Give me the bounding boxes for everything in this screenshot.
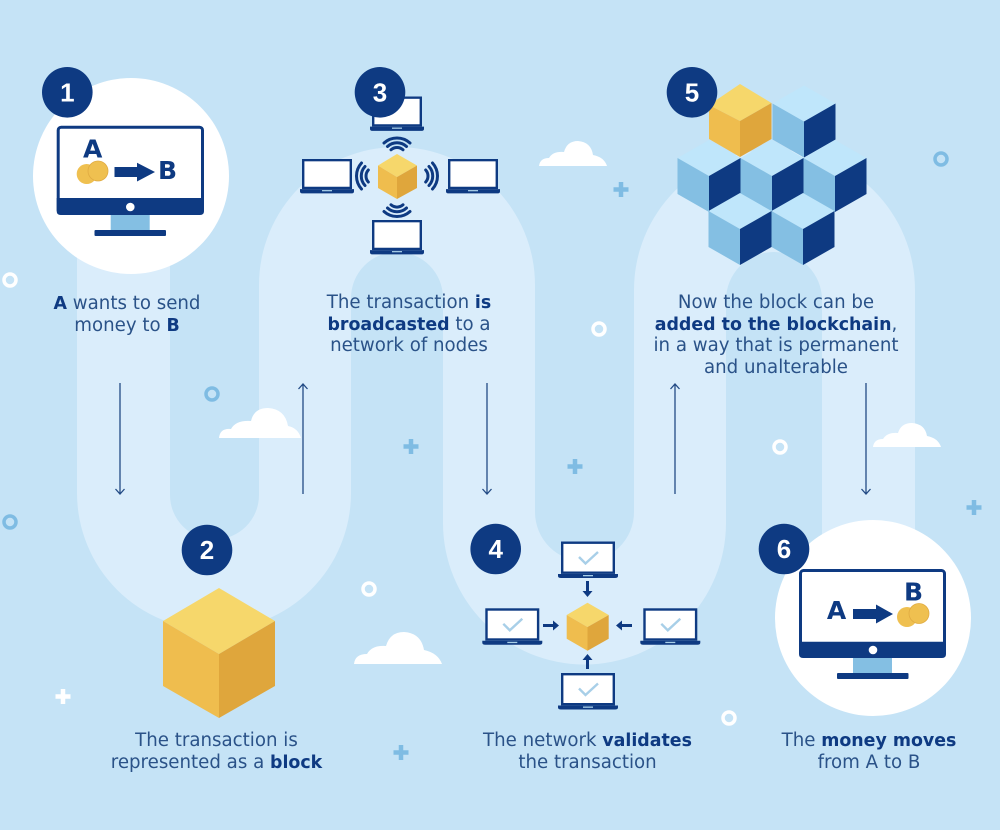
text: step 1: wants to send [73,293,200,314]
text: step 4: The network [482,730,602,751]
icon: monitor money arrives [799,570,946,679]
text: step 2: block [270,753,323,773]
text: step 5: , [892,314,897,335]
badge 3: 3 [373,78,387,108]
text: step 3: to a [455,314,491,335]
icon: monitor money arrives: A [827,596,847,625]
text: step 6: from A to B [818,752,920,773]
decorative plus signs [56,182,982,760]
badge 6 [759,524,809,574]
badge 6: 6 [777,534,791,564]
icon: validating laptops and cube [482,543,700,710]
badge 1 [42,67,93,118]
clouds [219,141,941,664]
badge 2: 2 [200,535,214,565]
badge 4 [470,524,521,574]
text: step 1: A [54,294,68,314]
text: step 3: is [475,293,491,313]
text: step 6: The [781,730,821,751]
text: step 2: represented as a [111,752,270,773]
text: step 5: Now the block can be [678,292,874,313]
step 1 [33,67,229,336]
decorative rings [4,153,947,724]
badge 3 [355,67,405,118]
badge 4: 4 [488,534,503,564]
badge 5 [667,67,717,118]
icon: broadcast laptops and cube [300,98,500,254]
icon: monitor A to B: A [83,134,103,163]
text: step 2: The transaction is [134,730,298,751]
step 3 [300,67,500,356]
icon: blockchain cubes [678,84,866,265]
badge 1: 1 [60,78,75,108]
step 6 [759,520,971,773]
icon: monitor money arrives: B [904,578,923,607]
badge 5: 5 [685,78,699,108]
text: step 4: the transaction [518,752,657,773]
text: step 1: B [166,316,180,336]
step 4 [470,524,700,773]
text: step 5: in a way that is permanent [653,335,899,356]
icon: monitor A to B: B [158,156,177,185]
text: step 1: money to [74,315,166,336]
text: step 3: The transaction [326,292,475,313]
text: step 3: network of nodes [330,335,488,356]
badge 2 [182,525,232,575]
arrows between steps [116,383,870,494]
text: step 4: validates [602,731,692,751]
step 2 [111,525,323,773]
text: step 6: money moves [821,731,956,751]
text: step 5: and unalterable [704,357,848,378]
serpentine path [77,147,915,664]
text: step 3: broadcasted [327,315,450,335]
step 1 white circle [33,78,229,274]
step 5 [653,67,899,378]
icon: yellow block [163,588,275,718]
icon: monitor A to B [57,127,204,236]
step 6 white circle [775,520,971,716]
text: step 5: added to the blockchain [655,315,892,335]
